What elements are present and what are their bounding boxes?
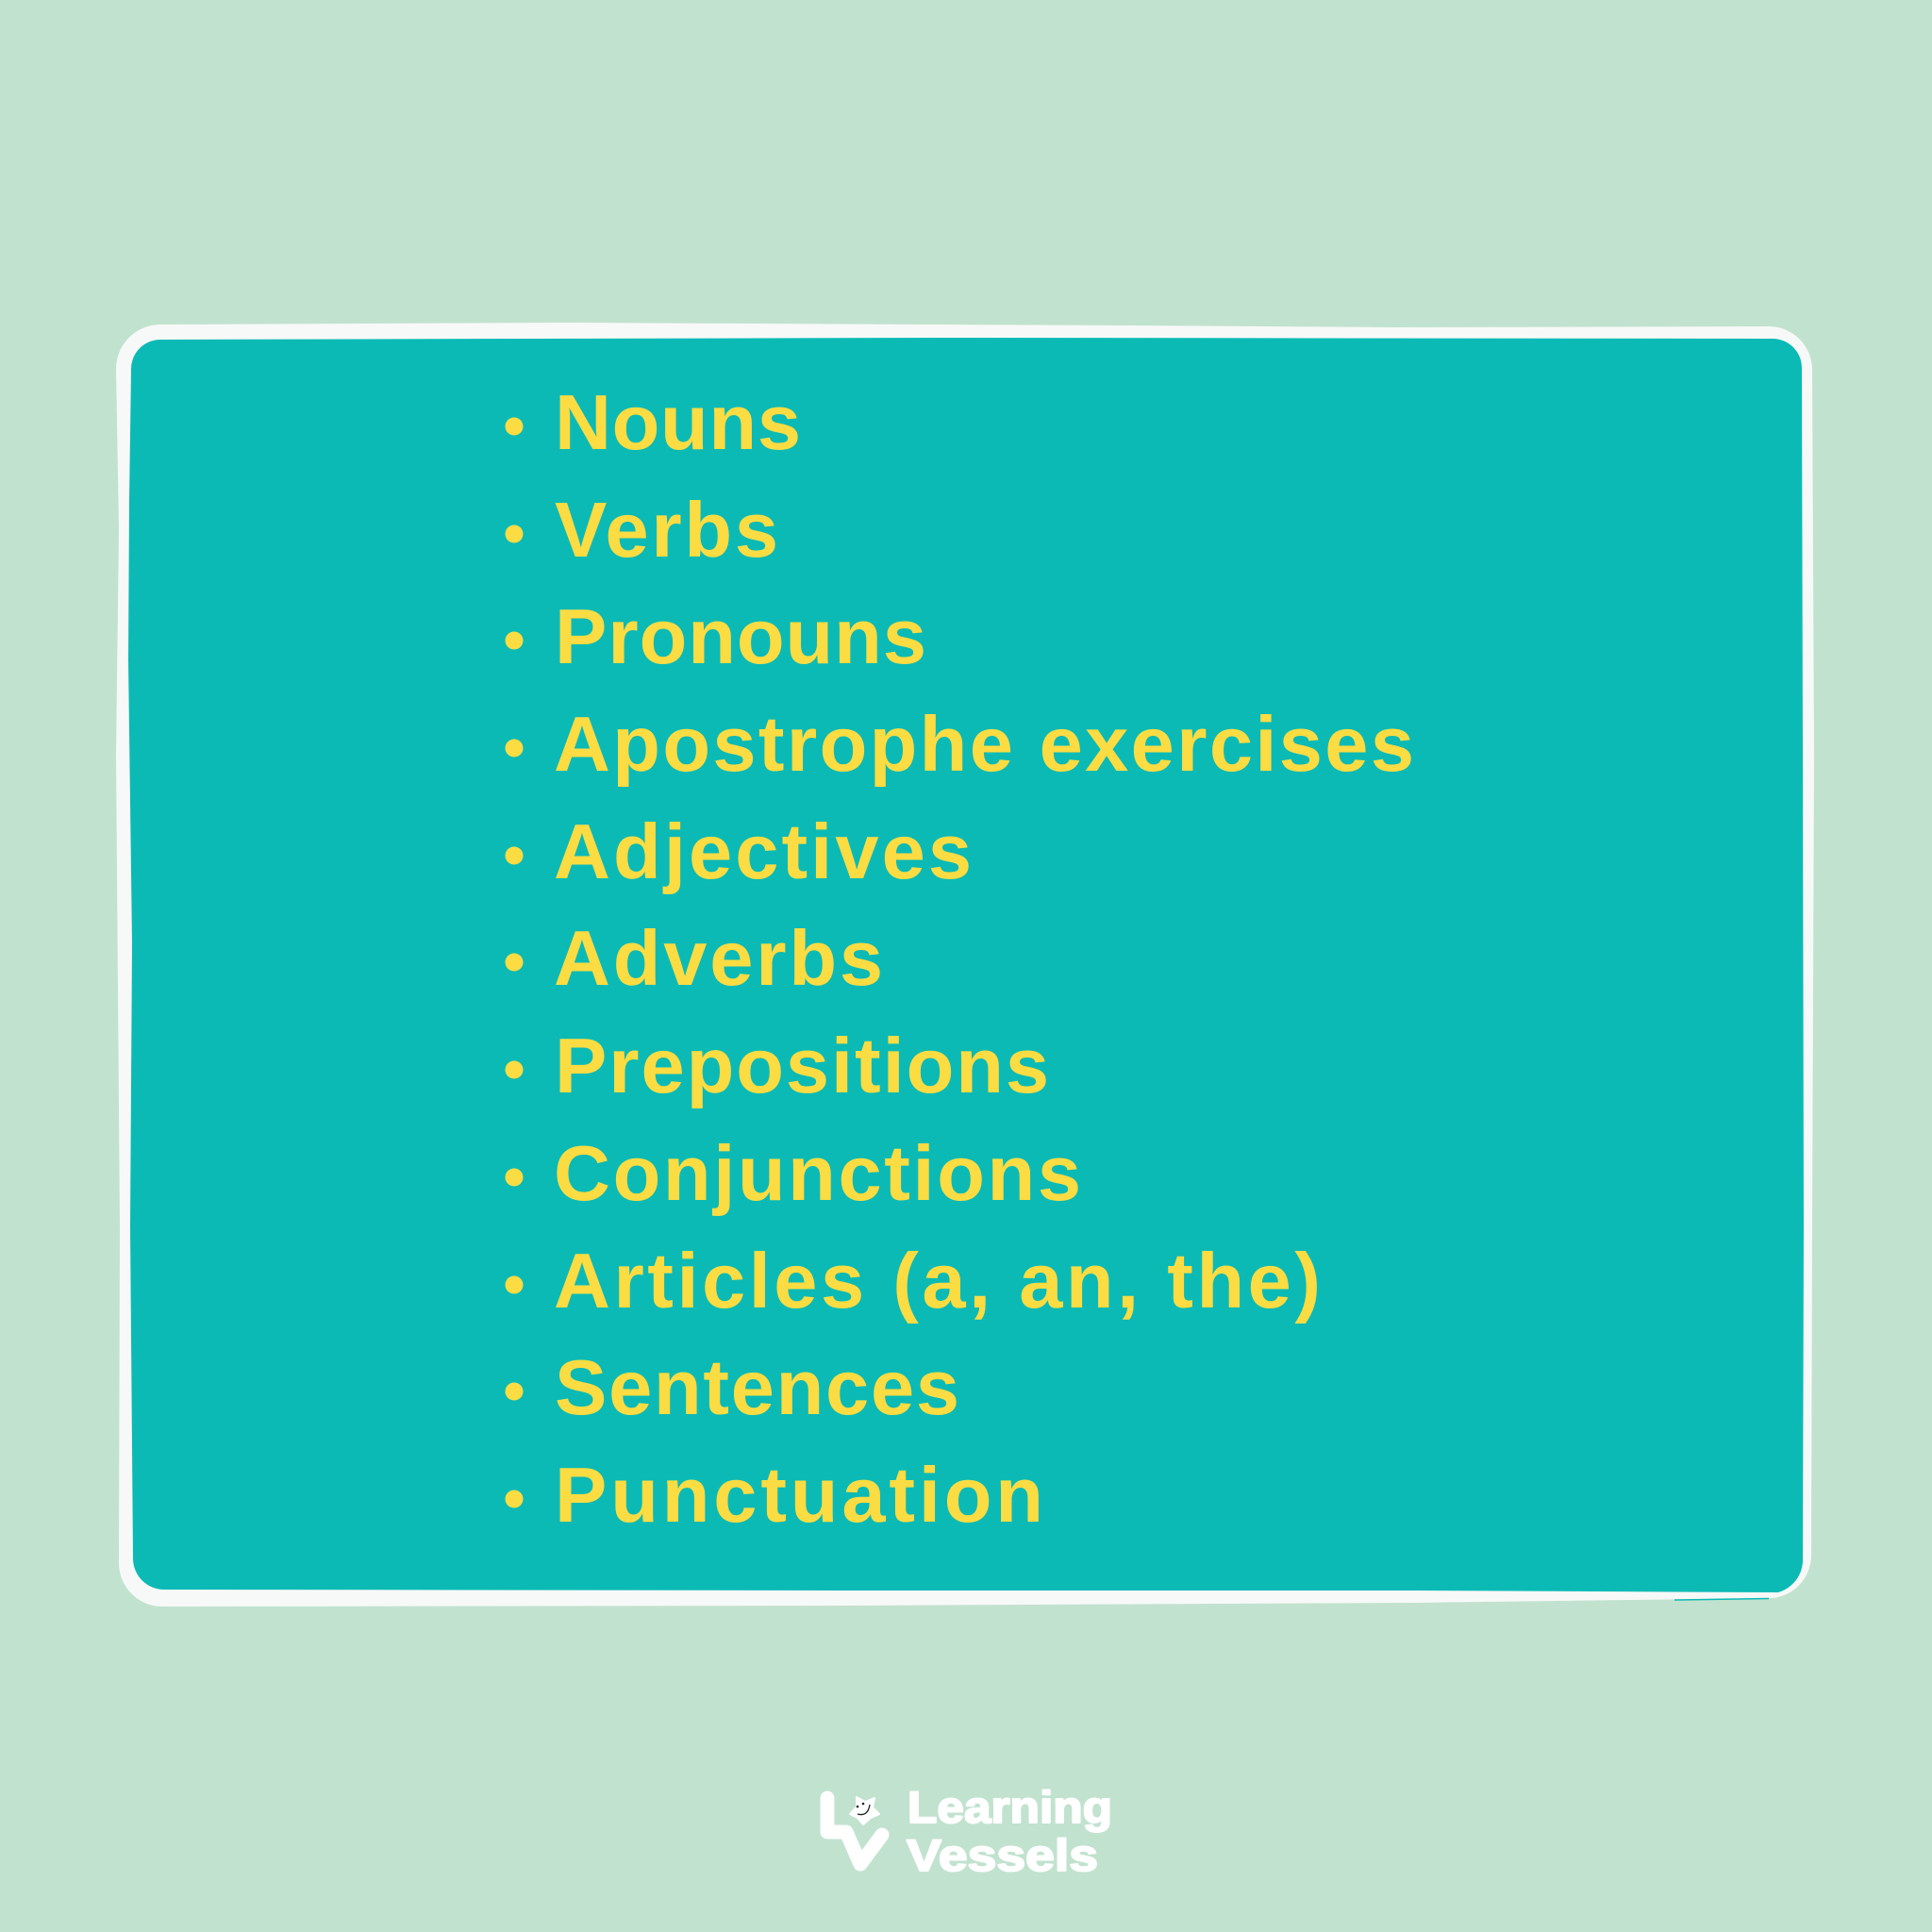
item: Conjunctions: Conjunctions [554,1129,1081,1217]
item: Pronouns: Pronouns [555,592,926,680]
icon: LV mark [827,1798,882,1864]
item: Sentences: Sentences [555,1343,959,1431]
logo wordmark: Learning [908,1782,1112,1832]
item: Punctuation: Punctuation [555,1451,1043,1539]
item: Prepositions: Prepositions [555,1022,1049,1109]
item: Nouns: Nouns [555,378,801,466]
item: Adjectives: Adjectives [554,808,972,895]
item: Apostrophe exercises: Apostrophe exercises [554,700,1414,788]
logo: Learning Vessels [827,1782,1112,1880]
card white border [116,323,1814,1607]
icon: smiling star [850,1797,879,1824]
logo wordmark: Vessels [907,1830,1098,1880]
item: Verbs: Verbs [555,486,778,574]
item: Articles (a, an, the): Articles (a, an, the) [554,1237,1321,1324]
card bottom-right teal sliver [1674,1598,1769,1600]
panel: teal topic list card [116,323,1814,1607]
topic list [506,378,1414,1539]
logo wordmark [907,1782,1112,1880]
item: Adverbs: Adverbs [554,914,883,1002]
card teal fill [128,338,1804,1592]
